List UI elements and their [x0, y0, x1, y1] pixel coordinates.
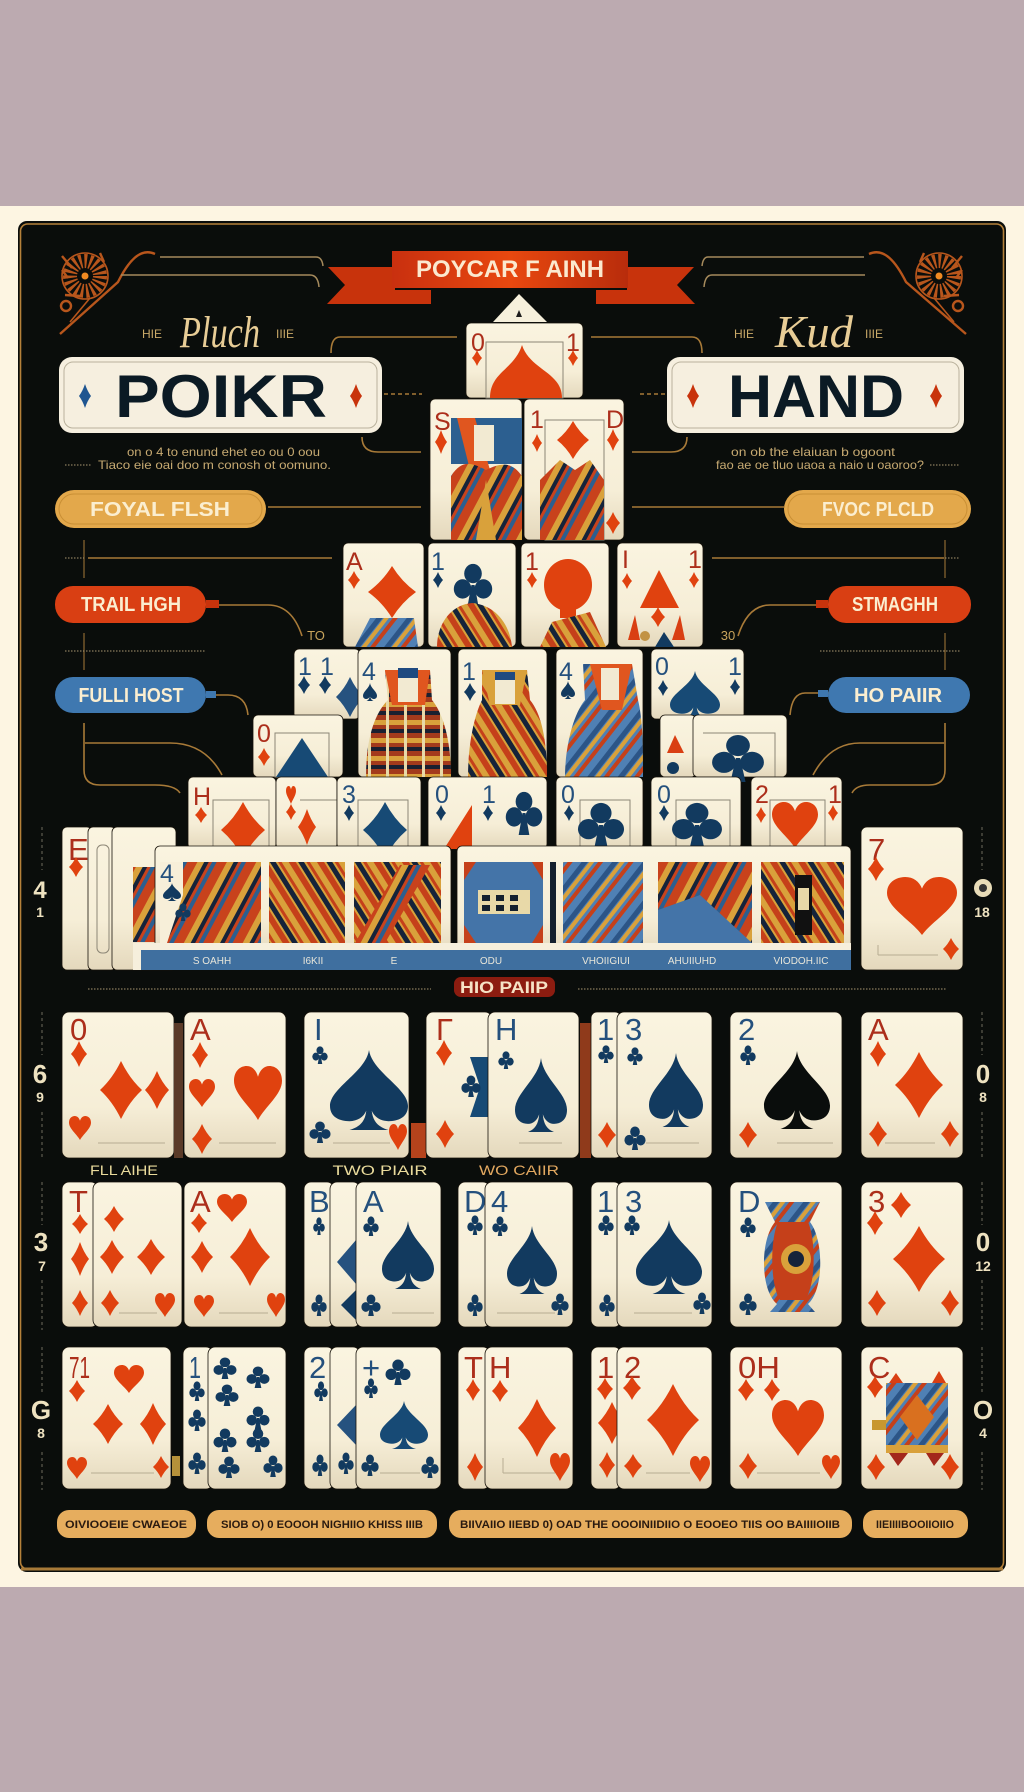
plaque: POKER — [59, 357, 382, 433]
card row A: black spade — [730, 1012, 842, 1158]
footer pill four: IIEIIIIBOOIIOIIO — [876, 1519, 954, 1531]
card: row four face three: 4 — [559, 658, 573, 686]
card row C: clubs: 1 — [189, 1350, 201, 1385]
blue bar captions — [133, 943, 851, 970]
card row B: one and three: 1 — [597, 1184, 614, 1219]
pill: full house — [55, 677, 216, 713]
card: pyramid top — [466, 323, 583, 398]
card: pyramid top: 0 — [471, 329, 485, 357]
card: row five club: 0 — [435, 781, 449, 809]
card: row five club: 1 — [482, 781, 496, 809]
side numbers row C left: 8 — [37, 1425, 45, 1441]
card: row three club — [428, 543, 516, 647]
card: row four face three — [556, 649, 643, 777]
pill: royal flush right: FVOC PLCLD — [822, 499, 934, 521]
card: row four-b right narrow — [660, 715, 696, 777]
blue bar captions: ODU — [480, 956, 502, 967]
corner ornament left — [60, 252, 155, 334]
blue bar captions: VHOIIGIUI — [582, 956, 630, 967]
pill: straight: STMAGHH — [852, 594, 938, 616]
card: large heart — [861, 827, 963, 970]
card row B: D and four: D — [464, 1184, 486, 1219]
blue bar captions: VIODOH.IIC — [773, 956, 829, 967]
card row A: H spade: H — [495, 1012, 517, 1047]
card: row three triangle: 1 — [688, 546, 702, 574]
card: row four back right: 1 — [728, 653, 742, 681]
card row C: T and H: H — [489, 1350, 511, 1385]
footer pill four — [863, 1510, 968, 1538]
card row A: three spade: 3 — [625, 1012, 642, 1047]
side numbers row A left — [33, 1059, 47, 1105]
script word right: Kud — [774, 306, 854, 357]
card row C: fan tree — [304, 1347, 441, 1489]
card row A: shadow sliver — [174, 1023, 183, 1158]
script word right: IIIE — [865, 327, 883, 341]
pill: no pair — [818, 677, 970, 713]
side numbers row C left: G — [31, 1395, 51, 1425]
pill: royal flush right — [784, 490, 971, 528]
card: row five club two — [556, 777, 643, 849]
card row B: fan spade — [304, 1182, 441, 1327]
script word right: HIE — [734, 327, 754, 341]
card: row three spade: 1 — [525, 548, 539, 576]
card row A: back card with star: Γ — [436, 1012, 453, 1047]
card: row five club three: 0 — [657, 781, 671, 809]
card row A: black spade: 2 — [738, 1012, 755, 1047]
blue bar captions: E — [391, 956, 398, 967]
card row B: back T — [62, 1182, 98, 1327]
side numbers row A left: 9 — [36, 1089, 44, 1105]
blue bar captions: I6KII — [303, 956, 323, 967]
corner ornament right — [869, 252, 966, 334]
pill: straight — [721, 586, 971, 643]
card: row three spade — [521, 543, 609, 647]
card stack: large left: E — [68, 832, 89, 867]
footer pill three: BIIVAIIO IIEBD 0) OAD THE OOOINIIDIIO O EOOEO TIIS OO BAIIIIOIIB — [460, 1519, 840, 1531]
card: row three triangle — [617, 543, 703, 647]
side numbers row B right — [975, 1227, 991, 1274]
card: row three ace diamond — [343, 543, 424, 647]
card: row four back right — [651, 649, 744, 719]
card row A: back card one — [580, 1012, 621, 1158]
card row A: ace heart: A — [190, 1012, 211, 1047]
card: row four back left — [294, 649, 364, 719]
pill: no pair: HO PAIIR — [854, 685, 943, 707]
card: pyramid top: 1 — [566, 329, 580, 357]
card: row five H diamond — [188, 777, 276, 858]
panel: main black board — [18, 221, 1006, 1572]
card row A: H spade — [488, 1012, 579, 1158]
card row C: seven: 71 — [69, 1350, 90, 1385]
plaque: POKER: POIKR — [115, 363, 327, 430]
side numbers row A right: 8 — [979, 1089, 987, 1105]
card row A: ace diamond: A — [868, 1012, 889, 1047]
card row A: back card one: 1 — [597, 1012, 614, 1047]
footer pill one — [57, 1510, 196, 1538]
row labels: WO CAIIR — [479, 1162, 559, 1178]
plaque: HAND — [667, 357, 964, 433]
ribbon banner: POYCAR F AINH — [416, 256, 604, 283]
row number left top: 4 — [33, 877, 47, 904]
card: row four-b left — [253, 715, 343, 777]
card row A: pair of diamonds — [62, 1012, 174, 1158]
footer pill three — [449, 1510, 852, 1538]
card row C: T and H: T — [464, 1350, 483, 1385]
row number left top: 1 — [36, 904, 44, 920]
card row B: vase — [730, 1182, 842, 1327]
card row B: D and four: 4 — [491, 1184, 508, 1219]
side numbers row A left: 6 — [33, 1059, 47, 1089]
card: face right row two: D — [606, 406, 624, 434]
side numbers row B left: 7 — [38, 1258, 46, 1274]
pill: trail high: TRAIL HGH — [81, 594, 181, 616]
paper sheet — [0, 206, 1024, 1587]
card: row four back left: 1 — [298, 653, 312, 681]
row labels: FLL AIHE — [90, 1162, 158, 1178]
card row C: face mini: C — [868, 1350, 890, 1385]
card: row three ace diamond: A — [346, 548, 363, 576]
dotted divider — [88, 988, 946, 990]
card: row four back left: 1 — [320, 653, 334, 681]
card row B: one and three: 3 — [625, 1184, 642, 1219]
side numbers row B right: 12 — [975, 1258, 991, 1274]
row labels: TWO PIAIR — [332, 1162, 428, 1178]
side numbers row B right: 0 — [976, 1227, 990, 1257]
card: face right row two — [524, 399, 624, 540]
card: row five H diamond: H — [193, 783, 211, 811]
card row B: three diamond: 3 — [868, 1184, 885, 1219]
card row B: D and four — [458, 1182, 573, 1327]
card row B: back T: T — [69, 1184, 88, 1219]
card row C: fan tree: + — [362, 1350, 380, 1385]
card row C: one and two: 1 — [597, 1350, 614, 1385]
card row C: one and two: 2 — [624, 1350, 641, 1385]
card: row four-b left: 0 — [257, 720, 271, 748]
pill: trail high — [55, 586, 325, 643]
intro text right — [716, 445, 960, 472]
card row B: one and three — [591, 1182, 712, 1327]
card: row four face two: 1 — [462, 658, 476, 686]
card: row five club three — [651, 777, 741, 849]
card row B: ace — [184, 1182, 286, 1327]
pill: royal flush left: FOYAL FLSH — [90, 499, 230, 521]
card: row five red pair — [276, 777, 337, 849]
blue bar captions: S OAHH — [193, 956, 231, 967]
connector rules — [65, 507, 960, 793]
card row A: ace heart — [184, 1012, 286, 1158]
card row A: orange sliver — [411, 1123, 426, 1158]
intro text left: on o 4 to enund ehet eo ou 0 oou — [127, 445, 320, 459]
intro text left — [65, 445, 331, 472]
intro text right: fao ae oe tluo uaoa a naio u oaoroo? — [716, 458, 924, 472]
tag: no pair: HIO PAIIP — [460, 978, 548, 997]
footer pill two: SIOB O) 0 EOOOH NIGHIIO KHISS IIIB — [221, 1519, 423, 1531]
pill: straight: 30 — [721, 628, 735, 643]
script word right — [734, 306, 883, 357]
side numbers row B left: 3 — [34, 1227, 48, 1257]
card row A: spade: I — [314, 1012, 323, 1047]
footer pill two — [207, 1510, 437, 1538]
side numbers row A right: 0 — [976, 1059, 990, 1089]
card: row three triangle: I — [622, 546, 629, 574]
card: row five club — [428, 777, 547, 849]
card row B: fan spade: A — [363, 1184, 384, 1219]
small pyramid tip card — [493, 294, 547, 322]
plaque: HAND: HAND — [728, 363, 904, 430]
intro text right: on ob the elaiuan b ogoont — [731, 445, 896, 459]
card: large heart: 7 — [868, 832, 885, 867]
card: row four face two — [458, 649, 547, 777]
card row A: back card with star — [426, 1012, 492, 1158]
side dashed rules — [42, 827, 982, 1490]
card row C: seven — [62, 1347, 171, 1489]
script word left: IIIE — [276, 327, 294, 341]
card: row five blue diamond: 3 — [342, 781, 356, 809]
ribbon banner — [327, 251, 695, 304]
card: row five heart: 1 — [828, 781, 842, 809]
card: row five club two: 0 — [561, 781, 575, 809]
wide card: left triple art — [155, 846, 451, 956]
pill: full house: FULLI HOST — [78, 685, 184, 707]
card row C: clubs — [183, 1347, 286, 1489]
side numbers row C left — [31, 1395, 51, 1441]
card: row four back right: 0 — [655, 653, 669, 681]
row number right top — [974, 879, 992, 920]
card row C: fan tree: 2 — [309, 1350, 326, 1385]
row number left top — [33, 877, 47, 920]
footer pill one: OIVIOOEIE CWAEOE — [65, 1519, 187, 1531]
card: face left row two: S — [434, 408, 451, 436]
row number right top: 18 — [974, 904, 990, 920]
card: row three club: 1 — [431, 548, 445, 576]
card row C: heart — [730, 1347, 842, 1489]
card row B: vase: D — [738, 1184, 760, 1219]
card row B: diamonds — [93, 1182, 182, 1327]
blue bar captions: AHUIIUHD — [668, 956, 716, 967]
side numbers row C right: O — [973, 1395, 993, 1425]
intro text left: Tiaco eie oai doo m conosh ot oomuno. — [98, 458, 331, 472]
card row A: ace diamond — [861, 1012, 963, 1158]
side numbers row C right: 4 — [979, 1425, 987, 1441]
connector lines header — [331, 337, 702, 452]
card row B: ace: A — [190, 1184, 211, 1219]
card: row five heart — [751, 777, 842, 849]
script word left: HIE — [142, 327, 162, 341]
card row B: three diamond — [861, 1182, 963, 1327]
script word left: Pluch — [179, 308, 260, 357]
card: row five heart: 2 — [755, 781, 769, 809]
card row C: heart: 0H — [738, 1350, 780, 1385]
card: row four-b right — [693, 715, 787, 782]
card: row four face one — [358, 649, 451, 777]
card row C: one and two — [591, 1347, 712, 1489]
pill: trail high: TO — [307, 628, 325, 643]
side numbers row C right — [973, 1395, 993, 1441]
side numbers row B left — [34, 1227, 48, 1274]
header rules — [121, 257, 865, 287]
card: face right row two: 1 — [530, 406, 544, 434]
card row B: fan spade: B — [309, 1184, 330, 1219]
card: row four face one: 4 — [362, 658, 376, 686]
row labels — [90, 1162, 559, 1178]
card row A: spade — [304, 1012, 409, 1158]
card: row five blue diamond — [337, 777, 421, 858]
wide card: left triple art: 4 — [160, 860, 174, 888]
card row C: gold sliver — [172, 1456, 180, 1476]
pill: royal flush left — [55, 490, 266, 528]
card stack: large left — [62, 827, 176, 970]
card row A: three spade — [617, 1012, 712, 1158]
side numbers row A right — [976, 1059, 990, 1105]
card row C: face mini — [861, 1347, 963, 1489]
card row A: pair of diamonds: 0 — [70, 1012, 87, 1047]
card row C: T and H — [458, 1347, 573, 1489]
wide card: right quad art — [457, 846, 851, 956]
script word left — [142, 308, 294, 357]
card: face left row two — [430, 399, 522, 540]
